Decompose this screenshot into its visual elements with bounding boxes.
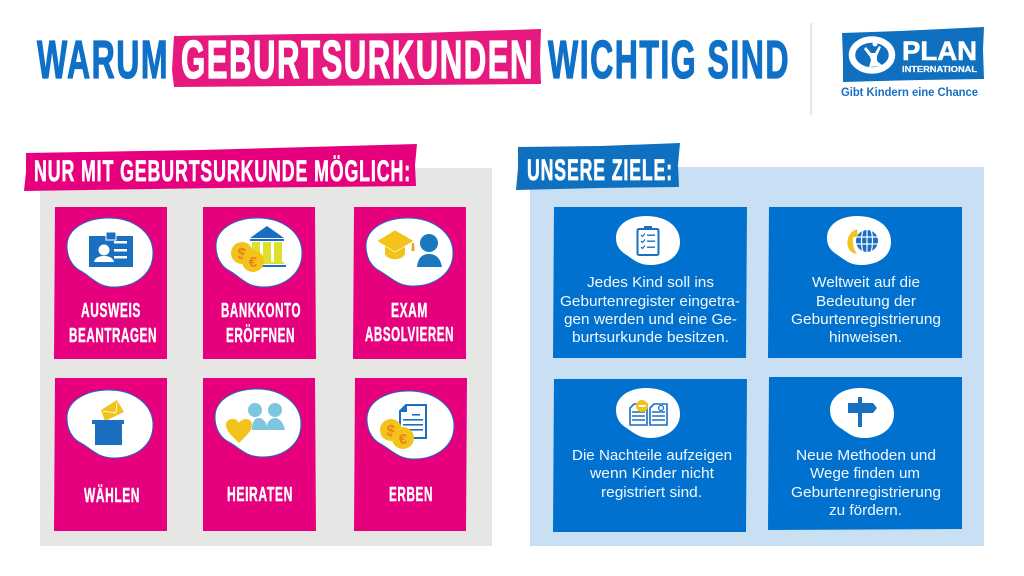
card: Neue Methoden: zu fördern. xyxy=(829,503,902,519)
heading: Nur mit Geburtsurkunde möglich xyxy=(24,144,417,191)
title: WICHTIG SIND xyxy=(548,30,790,90)
card: Bankkonto eröffnen: BANKKONTO xyxy=(221,300,301,322)
card: Weltweit: Bedeutung der xyxy=(816,294,916,310)
icon: checklist clipboard xyxy=(616,216,680,265)
card: Weltweit: Geburtenregistrierung xyxy=(791,312,941,328)
title: GEBURTSURKUNDEN xyxy=(181,30,534,90)
card: Jedes Kind xyxy=(553,207,747,358)
card: Ausweis beantragen xyxy=(54,207,167,359)
icon: document and coins: € xyxy=(399,431,408,448)
card: Jedes Kind: Geburtenregister eingetra- xyxy=(560,294,740,310)
icon: globe with arrow xyxy=(827,216,891,265)
card: Heiraten xyxy=(203,378,316,531)
card: Ausweis beantragen: BEANTRAGEN xyxy=(69,325,157,347)
card: Jedes Kind: Jedes Kind soll ins xyxy=(587,275,714,291)
icon: document and coins: $ xyxy=(387,423,396,440)
card: Exam absolvieren: ABSOLVIEREN xyxy=(365,324,454,346)
card: Wählen xyxy=(54,378,167,531)
logo: Plan International xyxy=(841,27,984,99)
heading: Unsere Ziele xyxy=(516,143,680,190)
card: Bankkonto eröffnen: ERÖFFNEN xyxy=(226,324,295,347)
card: Nachteile xyxy=(553,379,747,532)
card: Heiraten: HEIRATEN xyxy=(227,484,293,506)
divider xyxy=(810,23,812,115)
heading: Nur mit Geburtsurkunde möglich: NUR MIT GEBURTSURKUNDE MÖGLICH: xyxy=(34,155,411,188)
card: Jedes Kind: burtsurkunde besitzen. xyxy=(572,330,729,346)
icon: ballot box xyxy=(67,390,153,458)
card: Weltweit xyxy=(768,207,962,358)
card: Weltweit: hinweisen. xyxy=(829,330,902,346)
logo: Plan International: PLAN xyxy=(902,36,977,66)
heading: Unsere Ziele: UNSERE ZIELE: xyxy=(527,154,673,187)
icon: ID card xyxy=(67,218,153,287)
title: WARUM xyxy=(37,30,169,90)
card: Nachteile: registriert sind. xyxy=(601,485,702,501)
card: Bankkonto eröffnen xyxy=(203,207,316,359)
card: Ausweis beantragen: AUSWEIS xyxy=(81,300,141,322)
card: Exam absolvieren xyxy=(353,207,466,359)
card: Wählen: WÄHLEN xyxy=(84,484,140,507)
card: Nachteile: Die Nachteile aufzeigen xyxy=(572,448,732,464)
card: Neue Methoden xyxy=(768,377,962,530)
icon: signpost xyxy=(830,388,894,438)
panel: Unsere Ziele xyxy=(516,143,984,546)
icon: graduation cap and person xyxy=(366,218,453,286)
card: Exam absolvieren: EXAM xyxy=(391,300,428,322)
card: Neue Methoden: Wege finden um xyxy=(810,466,920,482)
icon: two documents xyxy=(616,388,680,438)
card: Erben xyxy=(354,378,467,531)
card: Erben: ERBEN xyxy=(389,484,433,506)
icon: heart and couple xyxy=(215,389,301,457)
logo: Plan International: Gibt Kindern eine Chance xyxy=(841,85,978,99)
panel: Nur mit Geburtsurkunde möglich xyxy=(24,144,492,546)
icon: bank and coins: € xyxy=(249,254,258,271)
card: Neue Methoden: Neue Methoden und xyxy=(796,448,936,464)
card: Jedes Kind: gen werden und eine Ge- xyxy=(564,312,737,328)
icon: bank and coins xyxy=(216,218,302,287)
card: Nachteile: wenn Kinder nicht xyxy=(589,466,714,482)
card: Neue Methoden: Geburtenregistrierung xyxy=(791,485,941,501)
logo: Plan International: INTERNATIONAL xyxy=(902,65,977,74)
icon: document and coins xyxy=(367,391,454,459)
icon: bank and coins: $ xyxy=(238,246,247,263)
card: Weltweit: Weltweit auf die xyxy=(812,275,920,291)
